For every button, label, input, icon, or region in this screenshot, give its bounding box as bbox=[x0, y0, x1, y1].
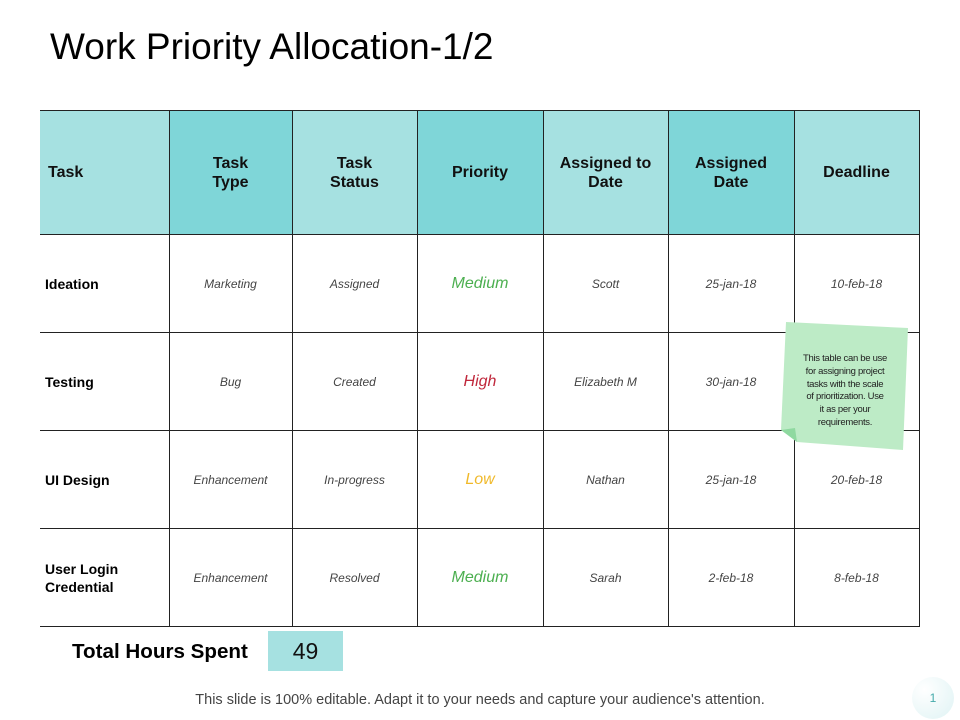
table: 25-jan-18 bbox=[706, 472, 756, 486]
page number bbox=[912, 677, 954, 719]
sticky note: tasks with the scale bbox=[807, 379, 883, 390]
table: Task bbox=[337, 154, 372, 172]
sticky note: of prioritization. Use bbox=[806, 391, 884, 402]
table: Status bbox=[330, 174, 379, 190]
table: User Login bbox=[45, 560, 118, 576]
table: 30-jan-18 bbox=[706, 374, 756, 388]
table: 25-jan-18 bbox=[706, 276, 756, 290]
table: Task bbox=[213, 154, 248, 172]
table: 20-feb-18 bbox=[831, 472, 882, 486]
table: Priority bbox=[452, 164, 508, 181]
table: Sarah bbox=[589, 570, 622, 584]
sticky note: it as per your bbox=[820, 404, 870, 415]
table: 2-feb-18 bbox=[709, 570, 753, 584]
table: Credential bbox=[45, 578, 113, 594]
table: 10-feb-18 bbox=[831, 276, 882, 290]
table: 8-feb-18 bbox=[834, 570, 879, 584]
table: Assigned to bbox=[560, 154, 651, 172]
table: Scott bbox=[592, 276, 619, 290]
table: Testing bbox=[45, 374, 94, 390]
table: Deadline bbox=[823, 164, 890, 181]
page number: 1 bbox=[930, 691, 936, 705]
total hours label: Total Hours Spent bbox=[72, 641, 248, 663]
table: Resolved bbox=[329, 570, 380, 584]
table: Elizabeth M bbox=[574, 374, 637, 388]
table: Created bbox=[333, 374, 376, 388]
total hours value bbox=[268, 631, 343, 671]
table: Date bbox=[714, 174, 748, 190]
table: Medium bbox=[452, 274, 508, 292]
table: UI Design bbox=[45, 472, 110, 488]
table: Task bbox=[48, 164, 83, 181]
sticky note: This table can be use bbox=[803, 353, 887, 364]
total hours value: 49 bbox=[293, 638, 318, 664]
table: Enhancement bbox=[193, 570, 268, 584]
table: Date bbox=[588, 174, 623, 190]
table: Type bbox=[212, 174, 249, 190]
table: Marketing bbox=[204, 276, 257, 290]
table: Low bbox=[465, 470, 495, 488]
sticky note: requirements. bbox=[818, 417, 872, 428]
table: Enhancement bbox=[193, 472, 268, 486]
table: Assigned bbox=[330, 276, 379, 290]
table: High bbox=[464, 372, 496, 390]
table: Assigned bbox=[695, 154, 767, 172]
footer text: This slide is 100% editable. Adapt it to your needs and capture your audience's attention. bbox=[195, 692, 765, 708]
table: Nathan bbox=[586, 472, 625, 486]
sticky note: for assigning project bbox=[806, 366, 884, 377]
table: Bug bbox=[220, 374, 241, 388]
sticky note bbox=[781, 322, 908, 450]
table: Medium bbox=[452, 568, 508, 586]
title: Work Priority Allocation-1/2 bbox=[50, 26, 493, 67]
table bbox=[40, 110, 920, 627]
table: In-progress bbox=[324, 472, 385, 486]
table: Ideation bbox=[45, 276, 99, 292]
